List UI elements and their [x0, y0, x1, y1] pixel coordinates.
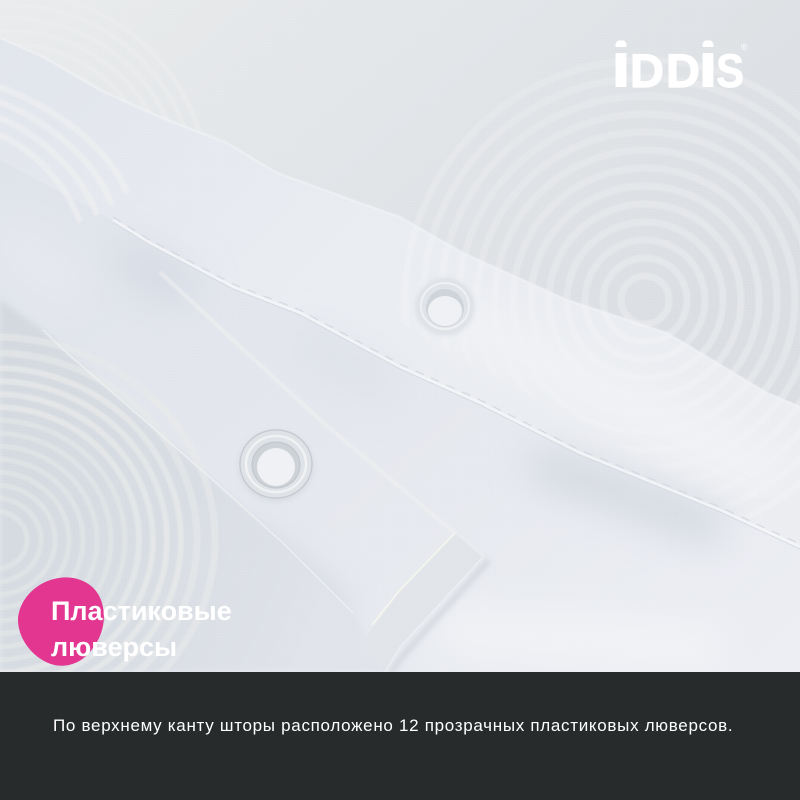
stitched seam line — [113, 217, 800, 549]
upper curtain panel — [0, 0, 800, 404]
heading text: люверсы — [51, 632, 177, 662]
brand logo — [616, 40, 748, 88]
heading text — [51, 596, 232, 662]
icon: pink blob — [18, 577, 104, 666]
flap hem seams — [43, 272, 489, 672]
eyelet: upper — [416, 279, 474, 335]
brand logo: D — [666, 44, 700, 97]
lower left seam zone — [0, 300, 385, 743]
rings showing through hem: left — [0, 87, 127, 222]
eyelet: lower — [239, 430, 313, 501]
concentric rings: lower left — [0, 337, 215, 743]
badge: heading with pink blob — [18, 577, 232, 666]
heading text: Пластиковые — [51, 596, 232, 626]
brand logo: i — [610, 29, 632, 101]
brand logo: i — [697, 29, 719, 101]
hem band and fold — [0, 38, 800, 434]
brand logo: ® — [741, 42, 748, 52]
brand logo: S — [716, 44, 744, 97]
concentric rings: top left, faint — [0, 0, 208, 388]
soft drape shadows — [0, 230, 720, 650]
footer description: По верхнему канту шторы расположено 12 прозрачных пластиковых люверсов. — [53, 716, 733, 735]
footer bar — [0, 672, 800, 800]
brand logo: D — [630, 44, 664, 97]
rings showing through hem: right — [405, 60, 800, 540]
concentric rings: top right — [552, 95, 800, 406]
